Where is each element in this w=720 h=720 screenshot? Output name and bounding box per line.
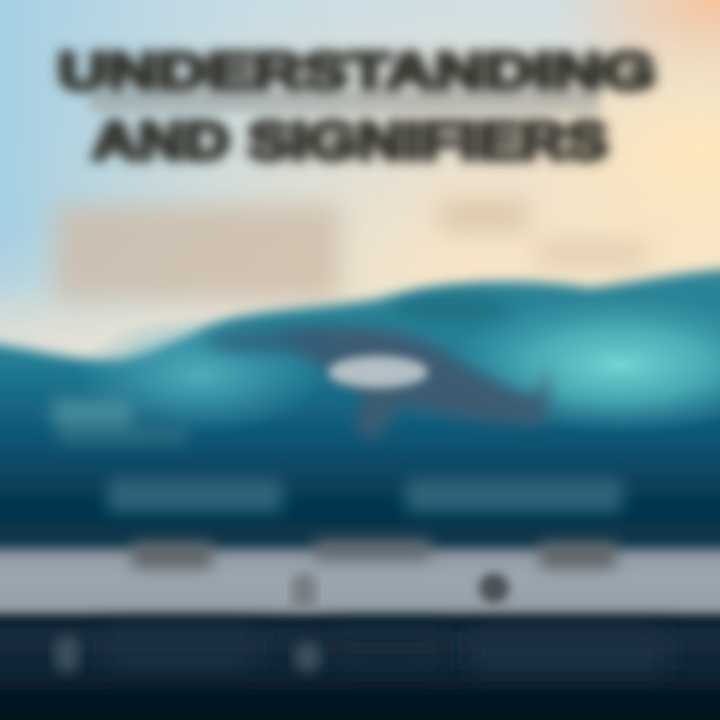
title: UNDERSTANDING: [58, 43, 656, 101]
icon: band dot: [479, 573, 509, 603]
title: [58, 43, 656, 171]
text: footer left: [105, 632, 255, 666]
background: sky gradient: [0, 0, 720, 370]
icon: band marker: [292, 574, 316, 608]
ocean text block: left heading: [52, 398, 186, 444]
text: footer centre: [335, 632, 445, 664]
icon: footer left: [54, 636, 80, 672]
band label: right: [540, 542, 616, 568]
ocean text block: lower right: [406, 478, 622, 512]
title: AND SIGNIFIERS: [92, 111, 608, 171]
intro text blocks: [55, 202, 648, 300]
band label: left: [132, 542, 212, 568]
ocean text block: lower left: [108, 478, 282, 512]
band label: centre: [315, 540, 430, 560]
shark illustration: [205, 327, 550, 440]
panel: grey band: [0, 540, 720, 615]
panel: footer: [0, 624, 720, 720]
text: footer right: [470, 634, 665, 670]
ocean wave: [0, 268, 720, 560]
icon: footer centre: [294, 642, 322, 672]
